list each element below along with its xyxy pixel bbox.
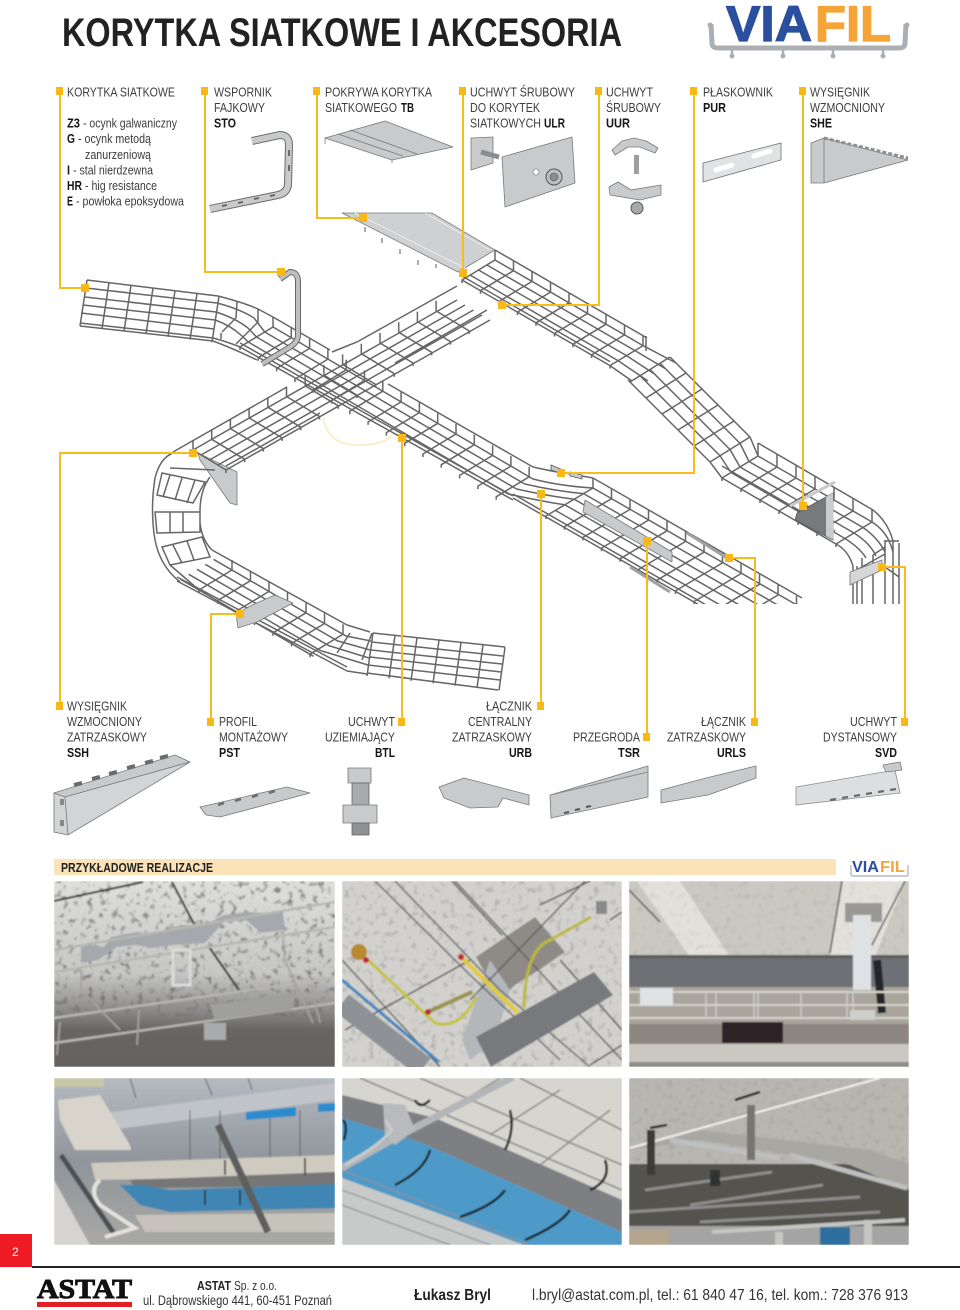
- label: profil PST: MONTAŻOWY: [219, 730, 289, 744]
- label: wysiegnik SSH: ZATRZASKOWY: [67, 730, 148, 744]
- label: lacznik URB: [452, 700, 533, 760]
- mesh section: lower main tray: [513, 465, 802, 637]
- text: korytka siatkowe finishes: - stal nierdzewna: [73, 164, 153, 178]
- icon: plaskownik PUR: [703, 143, 781, 182]
- mesh section: far right tray: [722, 443, 873, 547]
- label: uchwyt SVD: SVD: [875, 746, 897, 760]
- label: lacznik URB: ŁĄCZNIK: [486, 700, 533, 714]
- support profile PST under tray: [236, 595, 293, 628]
- small logo: VIAFIL: FIL: [880, 859, 905, 876]
- mesh section: upper right tray: [462, 250, 647, 369]
- leader: uchwyt ULR: [459, 87, 467, 277]
- text: korytka siatkowe finishes: - powłoka epoksydowa: [76, 195, 184, 209]
- label: przegroda TSR: TSR: [618, 746, 640, 760]
- mesh section: left U-bend: [152, 453, 215, 590]
- label: wysiegnik SHE: WZMOCNIONY: [810, 101, 886, 115]
- text: korytka siatkowe finishes: Z3: [67, 117, 80, 131]
- leader: uchwyt SVD: [878, 563, 908, 726]
- label: uchwyt SVD: DYSTANSOWY: [823, 730, 898, 744]
- icon: przegroda TSR: [550, 766, 648, 818]
- label: uchwyt SVD: [823, 715, 898, 760]
- label: wysiegnik SSH: WZMOCNIONY: [67, 715, 143, 729]
- label: pokrywa TB: SIATKOWEGO: [325, 101, 397, 115]
- section banner: przykladowe realizacje: [54, 859, 836, 875]
- leader: korytka siatkowe: [56, 87, 89, 292]
- photo: stacked trays, right: [629, 1078, 909, 1245]
- leader: profil PST: [207, 610, 244, 726]
- page number tab: [0, 1234, 32, 1267]
- leader: lacznik URLS: [725, 554, 758, 726]
- label: przegroda TSR: PRZEGRODA: [573, 730, 641, 744]
- label: uchwyt ULR: SIATKOWYCH: [470, 117, 541, 131]
- label: uchwyt ULR: UCHWYT ŚRUBOWY: [470, 84, 576, 100]
- label: lacznik URB: URB: [509, 746, 532, 760]
- label: uchwyt BTL: [325, 715, 396, 760]
- label: uchwyt UUR: UUR: [606, 117, 630, 131]
- leader: lacznik URB: [537, 490, 545, 710]
- label: wspornik STO: [214, 86, 273, 131]
- photo: clamp on mesh tray under ceiling: [54, 881, 335, 1067]
- label: uchwyt ULR: [470, 84, 576, 131]
- label: lacznik URB: ZATRZASKOWY: [452, 730, 533, 744]
- mesh section: crossing tray: [173, 286, 490, 473]
- icon: uchwyt ULR: [471, 137, 575, 207]
- company address: [143, 1278, 332, 1308]
- contact person: Łukasz Bryl: [414, 1287, 491, 1304]
- text: korytka siatkowe finishes: - ocynk galwaniczny: [83, 117, 178, 131]
- photo: white and blue cables on trays, left: [54, 1078, 335, 1245]
- text: korytka siatkowe finishes: - hig resistance: [85, 179, 157, 193]
- text: korytka siatkowe finishes: [67, 86, 184, 209]
- icon: wysiegnik SSH: [54, 755, 190, 835]
- leader: wysiegnik SSH: [56, 449, 197, 710]
- section banner: przykladowe realizacje: PRZYKŁADOWE REALIZACJE: [61, 860, 213, 875]
- label: plaskownik PUR: PUR: [703, 101, 726, 115]
- mesh section: lower S-bend: [322, 625, 372, 674]
- text: korytka siatkowe finishes: - ocynk metodą: [78, 132, 151, 146]
- text: korytka siatkowe finishes: G: [67, 132, 75, 146]
- label: przegroda TSR: [573, 730, 641, 760]
- photo: tray on suspension under ceiling: [629, 881, 909, 1067]
- label: pokrywa TB: POKRYWA KORYTKA: [325, 86, 433, 100]
- page number tab: 2: [12, 1245, 19, 1259]
- icon: lacznik URB: [439, 778, 529, 808]
- company address: Sp. z o.o.: [234, 1278, 277, 1293]
- label: plaskownik PUR: PŁASKOWNIK: [703, 86, 774, 100]
- icon: uchwyt UUR: [609, 138, 661, 214]
- company address: ASTAT: [197, 1278, 231, 1293]
- label: plaskownik PUR: [703, 86, 774, 115]
- label: lacznik URLS: ŁĄCZNIK: [701, 715, 747, 729]
- title: KORYTKA SIATKOWE I AKCESORIA: [62, 11, 622, 55]
- icon: profil PST: [200, 787, 310, 817]
- mesh section: elbow and vertical tray: [836, 510, 899, 604]
- photo: grounding wires on bracket: [342, 881, 622, 1067]
- leader: przegroda TSR: [643, 537, 651, 741]
- label: wysiegnik SHE: SHE: [810, 117, 832, 131]
- mesh section: bottom straight tray: [367, 633, 505, 690]
- small logo: VIAFIL: VIA: [852, 859, 879, 876]
- logo: ASTAT: ASTAT: [37, 1274, 132, 1304]
- support bracket SHE: [790, 482, 835, 540]
- company address: ul. Dąbrowskiego 441, 60-451 Poznań: [143, 1292, 332, 1308]
- label: uchwyt UUR: UCHWYT: [606, 86, 653, 100]
- icon: pokrywa TB: [325, 121, 453, 163]
- bracket STO on tray: [262, 272, 298, 364]
- label: lacznik URLS: ZATRZASKOWY: [667, 730, 747, 744]
- icon: uchwyt BTL: [343, 768, 377, 835]
- mesh section: main tray upper part: [240, 317, 533, 500]
- label: wspornik STO: WSPORNIK: [214, 86, 273, 100]
- label: uchwyt SVD: UCHWYT: [850, 715, 897, 729]
- label: profil PST: PROFIL: [219, 715, 257, 729]
- logo: VIAFIL: [708, 0, 910, 58]
- text: korytka siatkowe finishes: zanurzeniową: [85, 148, 151, 162]
- leader: uchwyt BTL: [398, 434, 406, 726]
- mesh section: angled reducer tray: [610, 346, 758, 478]
- label: wspornik STO: FAJKOWY: [214, 101, 266, 115]
- label: uchwyt BTL: BTL: [375, 746, 395, 760]
- photo: cables on trays, middle: [342, 1077, 622, 1245]
- mesh mask below the cut of the drawing: [520, 604, 940, 694]
- leader: uchwyt UUR: [498, 87, 602, 309]
- text: korytka siatkowe finishes: HR: [67, 179, 82, 193]
- leader: wysiegnik SHE: [799, 87, 807, 510]
- label: uchwyt BTL: UCHWYT: [348, 715, 395, 729]
- text: korytka siatkowe finishes: KORYTKA SIATKOWE: [67, 86, 175, 100]
- label: profil PST: PST: [219, 746, 240, 760]
- label: lacznik URLS: [667, 715, 747, 760]
- label: wysiegnik SHE: [810, 86, 886, 131]
- label: uchwyt BTL: UZIEMIAJĄCY: [325, 730, 396, 744]
- text: korytka siatkowe finishes: E: [67, 195, 73, 209]
- label: pokrywa TB: TB: [401, 101, 414, 115]
- label: wysiegnik SSH: [67, 700, 148, 760]
- leader: plaskownik PUR: [557, 87, 697, 477]
- mesh section: upper S-bend: [213, 296, 273, 360]
- label: pokrywa TB: [325, 86, 433, 115]
- label: profil PST: [219, 715, 289, 760]
- support bracket SSH under tray: [198, 453, 237, 505]
- mesh section: jog to lower main tray: [508, 467, 593, 505]
- cover TB on tray: [342, 213, 495, 272]
- connector URLS strips: [630, 533, 727, 592]
- icon: uchwyt SVD: [796, 762, 902, 805]
- label: uchwyt UUR: ŚRUBOWY: [606, 100, 662, 115]
- icon: wspornik STO: [210, 135, 289, 209]
- grounding wire: [323, 417, 392, 445]
- leader: pokrywa TB: [313, 87, 367, 222]
- text: korytka siatkowe finishes: I: [67, 164, 70, 178]
- leader: wspornik STO: [201, 87, 285, 276]
- label: wysiegnik SHE: WYSIĘGNIK: [810, 86, 871, 100]
- label: uchwyt ULR: ULR: [544, 117, 565, 131]
- assembly drawing: wire mesh cable trays: [80, 213, 940, 694]
- label: wysiegnik SSH: WYSIĘGNIK: [67, 700, 128, 714]
- label: lacznik URB: CENTRALNY: [468, 715, 533, 729]
- icon: lacznik URLS: [661, 766, 756, 803]
- mesh section: top-left straight tray: [80, 280, 219, 342]
- mesh section: bottom-left diagonal tray: [177, 550, 347, 671]
- label: uchwyt UUR: [606, 86, 662, 131]
- label: wspornik STO: STO: [214, 117, 236, 131]
- label: wysiegnik SSH: SSH: [67, 746, 89, 760]
- label: uchwyt ULR: DO KORYTEK: [470, 101, 541, 115]
- icon: wysiegnik SHE: [811, 138, 908, 183]
- footer rule: [32, 1266, 960, 1268]
- contact details: l.bryl@astat.com.pl, tel.: 61 840 47 16, tel. kom.: 728 376 913: [532, 1287, 908, 1304]
- label: lacznik URLS: URLS: [717, 746, 746, 760]
- divider TSR in tray: [583, 500, 672, 562]
- small logo: VIAFIL: [851, 859, 908, 876]
